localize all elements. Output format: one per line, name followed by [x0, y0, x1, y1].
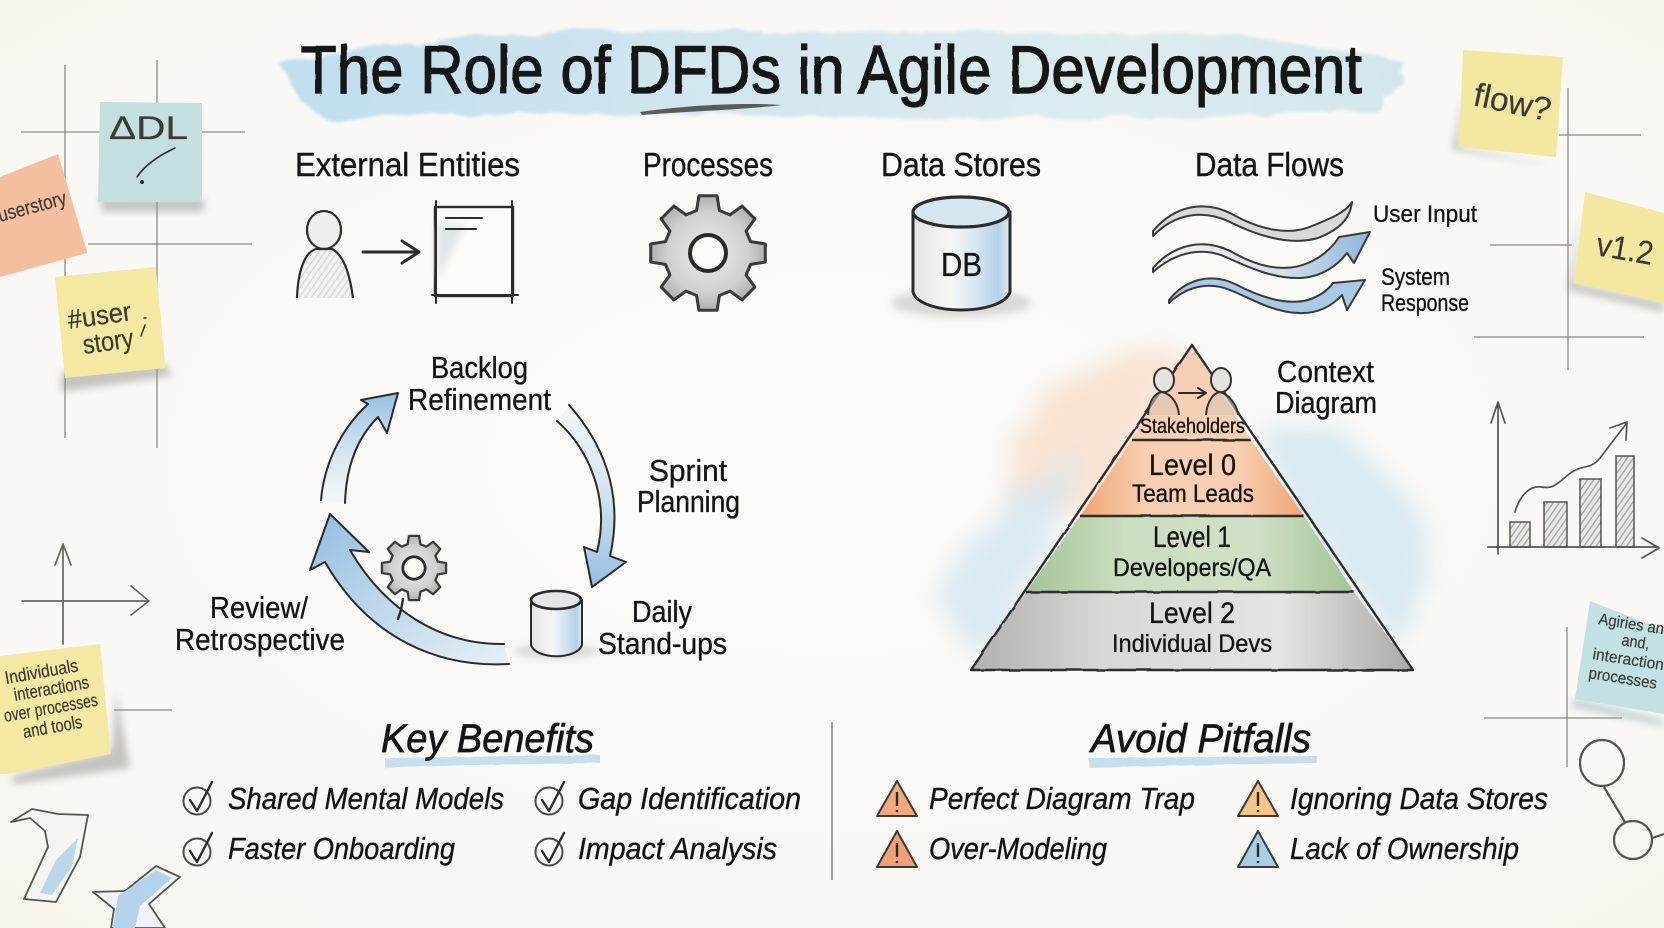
panel: avoid pitfalls	[877, 717, 1548, 867]
sticky note: user story: #user	[66, 296, 133, 335]
pitfall: perfect diagram trap: Perfect Diagram Trap	[929, 781, 1195, 816]
watercolor wash: left blue	[935, 450, 1080, 650]
sticky note: agile values	[1570, 601, 1664, 726]
icon: left axes sketch	[22, 544, 149, 644]
panel: data flows	[1153, 146, 1477, 317]
tier labels: Developers/QA	[1113, 554, 1271, 582]
label: user input: User Input	[1373, 201, 1477, 228]
sticky note: individuals and interactions: Individuals	[3, 655, 80, 688]
label: system response: System	[1381, 264, 1450, 291]
pitfall: over-modeling	[877, 831, 1107, 867]
underline wash	[385, 755, 600, 768]
tier: context apex	[1132, 345, 1251, 440]
sticky note: DDL: ΔDL	[109, 110, 188, 146]
icon: small cylinder	[514, 591, 598, 659]
tier labels: Stakeholders	[1140, 415, 1245, 438]
label: sprint planning	[637, 453, 740, 519]
icon: document	[432, 201, 518, 303]
sticky note: user story: story	[81, 323, 136, 360]
heading: Avoid Pitfalls	[1089, 717, 1311, 761]
heading: External Entities	[295, 146, 520, 183]
sticky note: flow?: flow?	[1471, 76, 1555, 128]
benefit: faster onboarding: Faster Onboarding	[228, 831, 455, 866]
tier labels: Individual Devs	[1112, 630, 1272, 658]
arrow: up to backlog	[321, 393, 398, 503]
icon: blue star scribble	[93, 866, 180, 928]
arrow: to daily stand-ups	[557, 405, 626, 587]
pyramid outline	[971, 345, 1413, 670]
panel: pyramid	[935, 345, 1432, 670]
tier labels: Team Leads	[1132, 480, 1254, 508]
arrow: outline review sweep	[310, 514, 509, 664]
sticky note: agile values: and,	[1620, 632, 1651, 653]
heading: Data Stores	[881, 146, 1041, 183]
icon: gear stem	[398, 599, 403, 619]
sticky note: individuals and interactions: and tools	[21, 712, 84, 742]
tier labels: Level 2	[1149, 597, 1235, 630]
panel: data stores	[881, 146, 1041, 317]
title text: The Role of DFDs in Agile Development	[300, 32, 1362, 108]
benefit: impact analysis: Impact Analysis	[578, 831, 777, 866]
label: review retrospective: Retrospective	[175, 622, 345, 657]
panel: processes	[643, 146, 773, 310]
arrow: user input flow	[1153, 232, 1370, 278]
arrow: plain flow	[1153, 202, 1352, 241]
sticky note: flow?	[1452, 50, 1563, 166]
label: review retrospective	[175, 590, 345, 657]
label: sprint planning: Sprint	[649, 453, 727, 488]
label: context diagram: Context	[1277, 354, 1374, 389]
benefit: gap identification: Gap Identification	[578, 781, 801, 816]
pitfall: lack of ownership: Lack of Ownership	[1290, 831, 1519, 866]
heading: Processes	[643, 146, 773, 183]
pitfall: ignoring data stores: Ignoring Data Stores	[1290, 781, 1548, 816]
heading: Key Benefits	[381, 717, 594, 761]
icon: curled paper scribble	[11, 809, 88, 902]
label: backlog refinement: Backlog	[431, 350, 528, 385]
icon: gear	[651, 196, 765, 310]
sticky note: DDL	[98, 102, 204, 212]
arrow: outline up to backlog	[321, 393, 398, 503]
label: context diagram	[1275, 354, 1377, 420]
title brush stroke	[278, 30, 1405, 122]
icon: database cylinder: DB	[941, 246, 982, 283]
label: backlog refinement	[408, 350, 551, 417]
heading: Data Flows	[1195, 146, 1344, 183]
label: system response: Response	[1381, 290, 1469, 317]
sticky note: v1.2: v1.2	[1594, 225, 1656, 272]
panel: key benefits	[184, 717, 801, 866]
benefit: shared mental models: Shared Mental Models	[228, 781, 504, 816]
sticky note: individuals and interactions: interactions	[12, 672, 91, 705]
icon: arrow	[363, 241, 419, 263]
icon: magnifier nodes	[1580, 740, 1664, 859]
tier: level 0	[1080, 440, 1304, 516]
sticky note: individuals and interactions	[0, 644, 130, 784]
label: sprint planning: Planning	[637, 484, 740, 519]
tier: level 1	[1026, 516, 1354, 592]
icon: small gear	[382, 536, 446, 600]
sticky note: individuals and interactions: over processes	[2, 690, 99, 726]
tier labels	[1112, 415, 1272, 658]
label: context diagram: Diagram	[1275, 385, 1377, 420]
label: review retrospective: Review/	[210, 590, 308, 625]
sketched grid lines	[21, 60, 1644, 767]
icon: database cylinder	[891, 197, 1031, 317]
label: system response	[1381, 264, 1469, 317]
sticky note: v1.2	[1568, 192, 1664, 312]
tier: level 2	[971, 592, 1413, 670]
pitfall: over-modeling: Over-Modeling	[929, 831, 1107, 866]
sticky note: user story	[55, 267, 172, 392]
panel: external entities	[295, 146, 520, 303]
watercolor wash: right blue	[1262, 430, 1432, 640]
arrow: outline to daily stand-ups	[557, 405, 626, 587]
title banner	[278, 30, 1405, 122]
panel: agile cycle	[175, 350, 740, 664]
underline wash	[1088, 756, 1317, 768]
tier labels: Level 1	[1153, 521, 1231, 554]
label: backlog refinement: Refinement	[408, 382, 551, 417]
label: daily stand-ups	[598, 594, 727, 661]
label: daily stand-ups: Stand-ups	[598, 626, 727, 661]
arrow: system response flow	[1169, 278, 1365, 313]
tier labels: Level 0	[1149, 449, 1236, 482]
arrow: review sweep	[310, 514, 509, 664]
title underline	[640, 104, 782, 115]
sticky note: userstory	[0, 154, 88, 277]
chart: bar sketch	[1488, 402, 1659, 558]
icon: person	[297, 211, 353, 298]
watercolor wash: orange	[1010, 345, 1185, 520]
sticky note: agile values: processes	[1587, 665, 1658, 693]
icon: stakeholders	[1148, 368, 1238, 415]
label: daily stand-ups: Daily	[632, 594, 692, 629]
